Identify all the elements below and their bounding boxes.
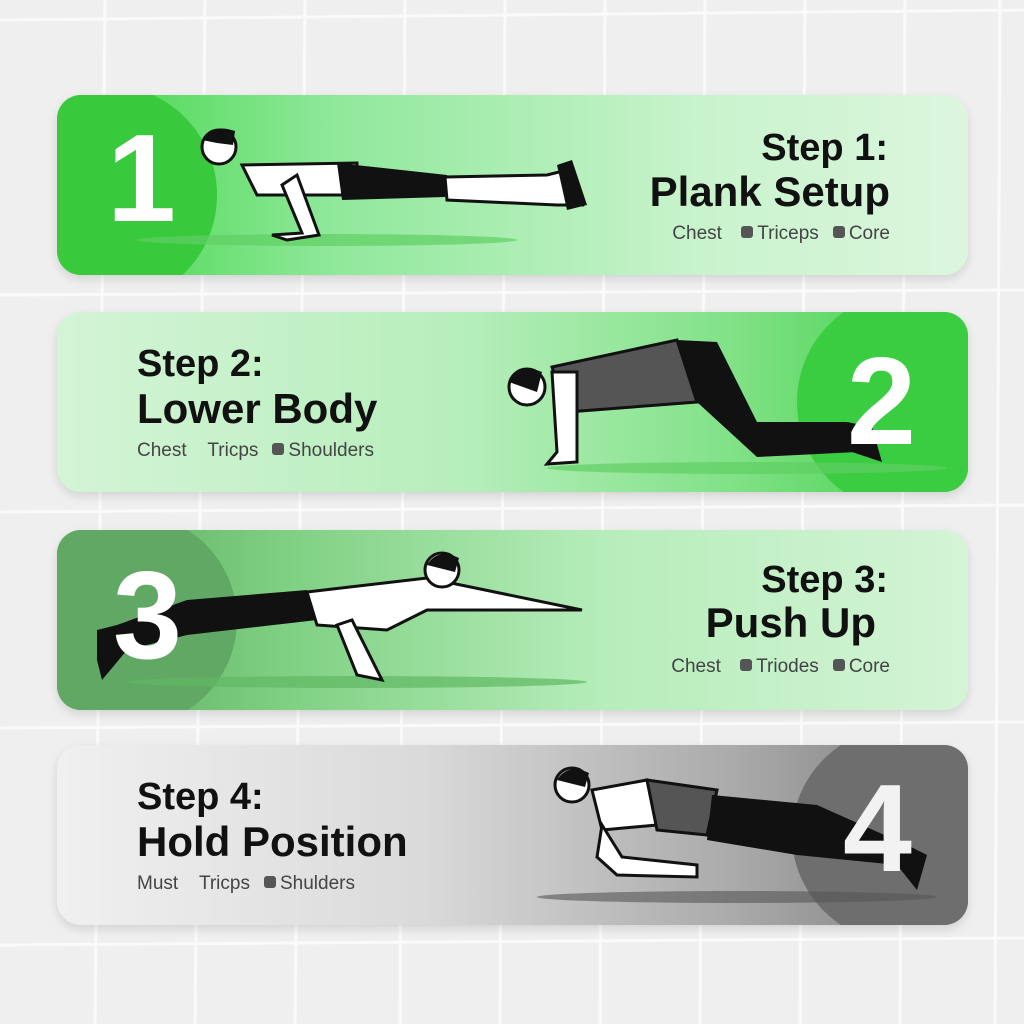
tags step 2: Chest Tricps Shoulders (137, 440, 374, 461)
tags step 4: Must Tricps Shulders (137, 873, 355, 894)
number 3: 3 (113, 547, 182, 685)
title step 3: Step 3: (761, 559, 888, 601)
panel: step 1 (57, 95, 968, 275)
number 4: 4 (843, 760, 912, 898)
tags step 3: Chest Triodes Core (671, 656, 890, 677)
panel: step 2: Lower Body (137, 385, 377, 432)
title step 4: Step 4: (137, 776, 264, 818)
panel: step 2 (57, 312, 968, 492)
number 2: 2 (847, 333, 916, 471)
panel: step 3: Push Up (706, 599, 876, 646)
figure: push up reach (97, 552, 587, 688)
panel: step 3 (57, 530, 968, 710)
number circle 3 (7, 510, 237, 730)
panel: step 1: Plank Setup (650, 168, 890, 215)
number 1: 1 (107, 110, 176, 248)
tags step 1: Chest Triceps Core (672, 223, 890, 244)
number circle 4 (792, 725, 1022, 945)
panel: step 4 (57, 745, 968, 925)
number circle 1 (0, 85, 217, 305)
figure: kneeling (508, 338, 947, 474)
title step 2: Step 2: (137, 343, 264, 385)
number circle 2 (797, 292, 1017, 512)
figure: forearm plank (537, 766, 937, 903)
title step 1: Step 1: (761, 127, 888, 169)
figure: plank (137, 128, 587, 246)
panel: step 4: Hold Position (137, 818, 408, 865)
